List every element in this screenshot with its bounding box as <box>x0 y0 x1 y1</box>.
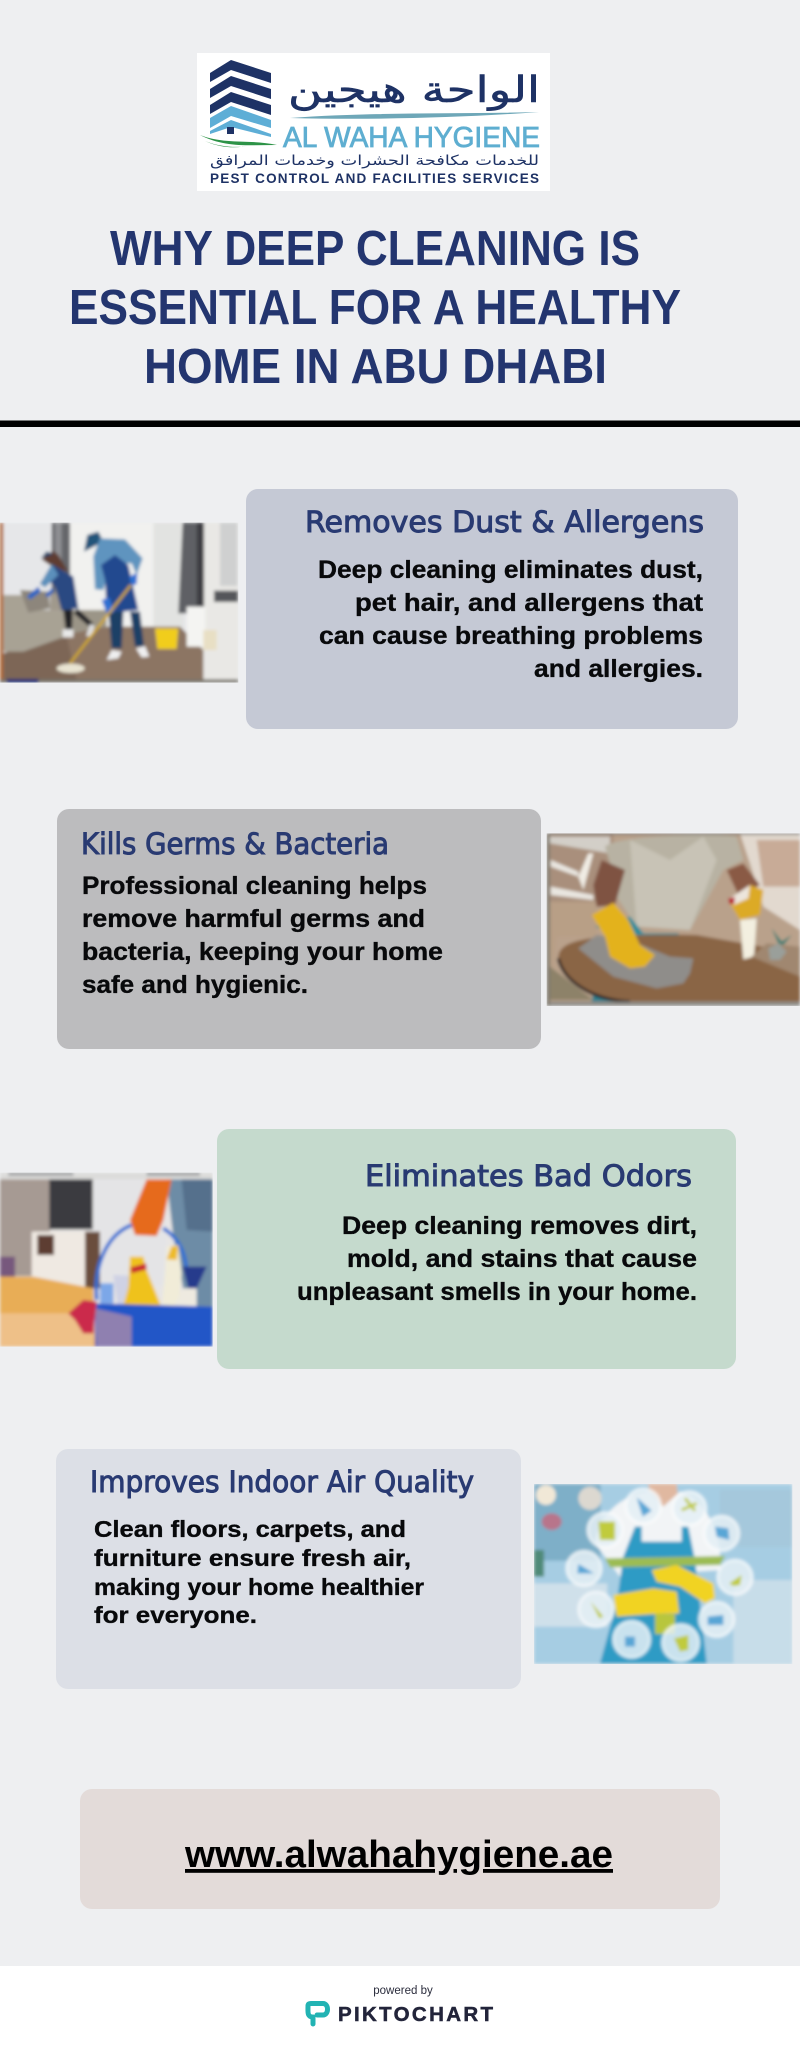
text: removes dust: Deep cleaning eliminates dust, <box>318 556 703 584</box>
logo <box>197 53 550 191</box>
photo: cleaner with icons and yellow gloves <box>534 1484 792 1664</box>
photo: gloved hands wiping a table <box>547 833 800 1006</box>
panel: improves air quality <box>56 1449 521 1689</box>
text: eliminates odors: unpleasant smells in your home. <box>297 1278 697 1306</box>
logo arabic name: الواحة هيجين <box>288 70 540 111</box>
man <box>84 532 103 552</box>
text: improves air quality: making your home healthier <box>94 1574 424 1600</box>
website link panel <box>80 1789 720 1909</box>
text: eliminates odors: Deep cleaning removes dirt, <box>342 1212 697 1240</box>
panel: removes dust <box>246 489 738 729</box>
panel: kills germs <box>57 809 541 1049</box>
icon: building chevrons <box>200 60 277 147</box>
text: eliminates odors: mold, and stains that cause <box>347 1245 697 1273</box>
text: improves air quality <box>94 1516 424 1628</box>
photo: bucket of cleaning supplies <box>0 1173 213 1347</box>
text: kills germs <box>82 872 443 999</box>
powered by label: powered by <box>373 1985 433 1997</box>
text: removes dust: and allergies. <box>534 655 703 683</box>
text: improves air quality: for everyone. <box>94 1602 257 1628</box>
heading: improves air quality: Improves Indoor Air Quality <box>90 1465 474 1499</box>
text: improves air quality: furniture ensure fresh air, <box>94 1545 411 1571</box>
text: kills germs: remove harmful germs and <box>82 905 425 933</box>
heading: kills germs: Kills Germs & Bacteria <box>81 827 389 861</box>
text: removes dust <box>318 556 704 683</box>
text: removes dust: can cause breathing problems <box>319 622 703 650</box>
text: kills germs: Professional cleaning helps <box>82 872 427 900</box>
text: removes dust: pet hair, and allergens that <box>355 589 704 617</box>
photo: couple cleaning a living room <box>0 523 238 683</box>
woman <box>42 551 68 572</box>
logo arabic tagline: للخدمات مكافحة الحشرات وخدمات المرافق <box>210 153 539 169</box>
panel: eliminates odors <box>217 1129 736 1369</box>
text: eliminates odors <box>297 1212 697 1306</box>
title: HOME IN ABU DHABI <box>144 340 607 394</box>
title: ESSENTIAL FOR A HEALTHY <box>69 281 681 335</box>
text: kills germs: safe and hygienic. <box>82 971 308 999</box>
website link: www.alwahahygiene.ae <box>184 1834 613 1876</box>
text: kills germs: bacteria, keeping your home <box>82 938 443 966</box>
text: improves air quality: Clean floors, carpets, and <box>94 1516 406 1542</box>
title <box>69 222 681 394</box>
heading: eliminates odors: Eliminates Bad Odors <box>365 1159 692 1193</box>
footer <box>0 1966 800 2046</box>
heading: removes dust: Removes Dust & Allergens <box>305 505 704 539</box>
divider line <box>0 420 800 427</box>
logo swoosh <box>290 112 539 119</box>
logo tagline: PEST CONTROL AND FACILITIES SERVICES <box>210 171 539 186</box>
logo english name: AL WAHA HYGIENE <box>283 122 540 154</box>
piktochart wordmark: PIKTOCHART <box>338 2003 493 2026</box>
title: WHY DEEP CLEANING IS <box>110 222 640 276</box>
icon: piktochart logo <box>308 2004 328 2024</box>
